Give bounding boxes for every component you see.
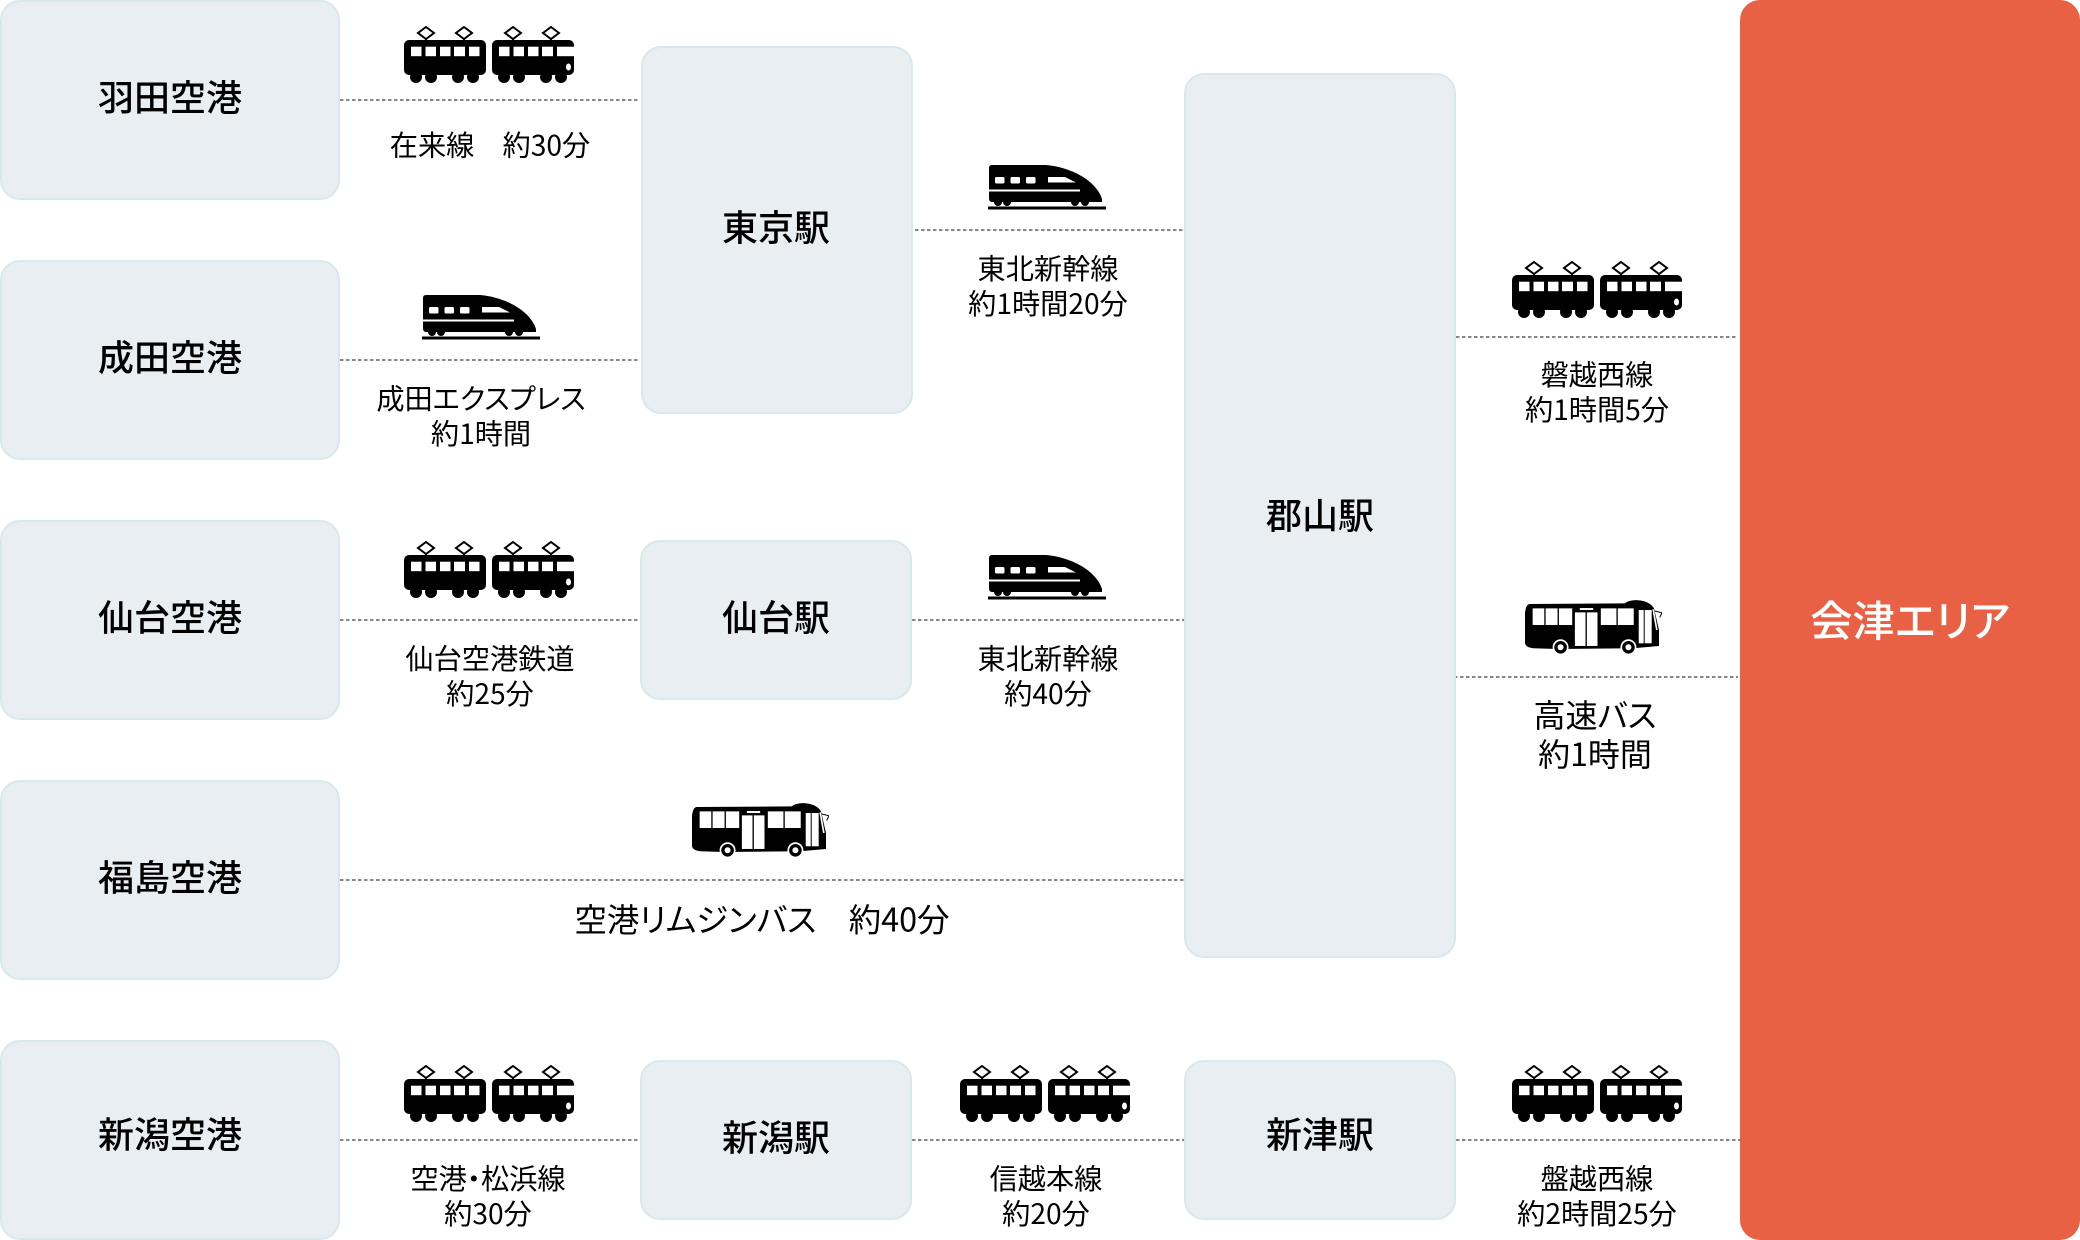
box: Niitsu Station [1184,1060,1456,1220]
text: Shinetsu main line [990,1157,1102,1233]
icon: shinkansen Tokyo [988,165,1106,210]
connector: Fukushima airport to Koriyama [340,879,1184,881]
text: Tohoku Shinkansen Sendai: 約40分 [1004,672,1092,713]
connector: Narita to Tokyo [340,359,638,361]
icon: train Niigata Station [960,1065,1130,1122]
connector: Koriyama to Aizu by train [1456,336,1738,338]
connector: Sendai station to Koriyama [912,619,1184,621]
label: Niigata Airport: 新潟空港 [98,1106,242,1158]
connector: Sendai airport to Sendai station [340,619,638,621]
text: Narita Express: 約1時間 [431,412,531,453]
text: Narita Express [376,377,586,453]
text: airport limousine bus: 空港リムジンバス 約40分 [575,894,949,942]
box: Niigata Station [640,1060,912,1220]
connector: Niigata station to Niitsu [912,1139,1184,1141]
icon: train Sendai Airport [404,541,574,598]
label: Niitsu Station: 新津駅 [1266,1106,1374,1158]
box: Koriyama Station [1184,73,1456,958]
text: Airport Matsuhama line [410,1157,566,1233]
text: Tohoku Shinkansen Tokyo: 約1時間20分 [968,282,1128,323]
text: highway bus [1533,691,1657,776]
text: Sendai Airport line [405,637,575,713]
icon: bus Fukushima [692,803,829,857]
box: Niigata Airport [0,1040,340,1240]
text: Tohoku Shinkansen Tokyo: 東北新幹線 [978,247,1118,288]
icon: train Niitsu [1512,1065,1682,1122]
text: Ban-etsu West line Koriyama [1525,353,1669,429]
label: Aizu area: 会津エリア [1810,589,2010,650]
text: Shinetsu main line: 信越本線 [990,1157,1102,1198]
icon: bus Koriyama [1525,600,1662,654]
icon: train Niigata Airport [404,1065,574,1122]
label: Koriyama Station: 郡山駅 [1266,487,1374,539]
icon: shinkansen Sendai [988,555,1106,600]
label: Haneda Airport: 羽田空港 [98,69,242,121]
box: Narita Airport [0,260,340,460]
text: Tohoku Shinkansen Tokyo [968,247,1128,323]
icon: train Koriyama [1512,261,1682,318]
text: Ban-etsu West line Niitsu: 約2時間25分 [1517,1192,1677,1233]
text: Shinetsu main line: 約20分 [1002,1192,1090,1233]
label: Tokyo Station: 東京駅 [722,199,830,251]
text: Tohoku Shinkansen Sendai [978,637,1118,713]
label: Sendai Airport: 仙台空港 [98,589,242,641]
text: highway bus: 高速バス [1533,691,1657,737]
text: Airport Matsuhama line: 約30分 [444,1192,532,1233]
icon: shinkansen Narita [422,295,540,340]
text: Ban-etsu West line Niitsu [1517,1157,1677,1233]
label: Sendai Station: 仙台駅 [722,589,830,641]
text: Sendai Airport line: 仙台空港鉄道 [405,637,575,678]
box: Tokyo Station [641,46,913,414]
connector: Koriyama to Aizu by bus [1454,676,1738,678]
connector: Niigata airport to Niigata station [340,1139,638,1141]
text: Narita Express: 成田エクスプレス [376,377,586,418]
box: Fukushima Airport [0,780,340,980]
label: Narita Airport: 成田空港 [98,329,242,381]
label: Fukushima Airport: 福島空港 [98,849,242,901]
text: Sendai Airport line: 約25分 [446,672,534,713]
box: Sendai Station [640,540,912,700]
text: Tohoku Shinkansen Sendai: 東北新幹線 [978,637,1118,678]
text: highway bus: 約1時間 [1538,730,1652,776]
label: Niigata Station: 新潟駅 [722,1109,830,1161]
text: Ban-etsu West line Koriyama: 磐越西線 [1541,353,1653,394]
text: Airport Matsuhama line: 空港・松浜線 [410,1157,566,1198]
text: Ban-etsu West line Koriyama: 約1時間5分 [1525,388,1669,429]
connector: Tokyo to Koriyama [915,229,1184,231]
connector: Niitsu to Aizu [1456,1139,1740,1141]
text: conventional line 30 min: 在来線 約30分 [390,124,590,164]
box: Haneda Airport [0,0,340,200]
text: Ban-etsu West line Niitsu: 盤越西線 [1541,1157,1653,1198]
connector: Haneda to Tokyo [340,99,638,101]
panel: Aizu area [1740,0,2080,1240]
icon: train Haneda [404,26,574,83]
box: Sendai Airport [0,520,340,720]
